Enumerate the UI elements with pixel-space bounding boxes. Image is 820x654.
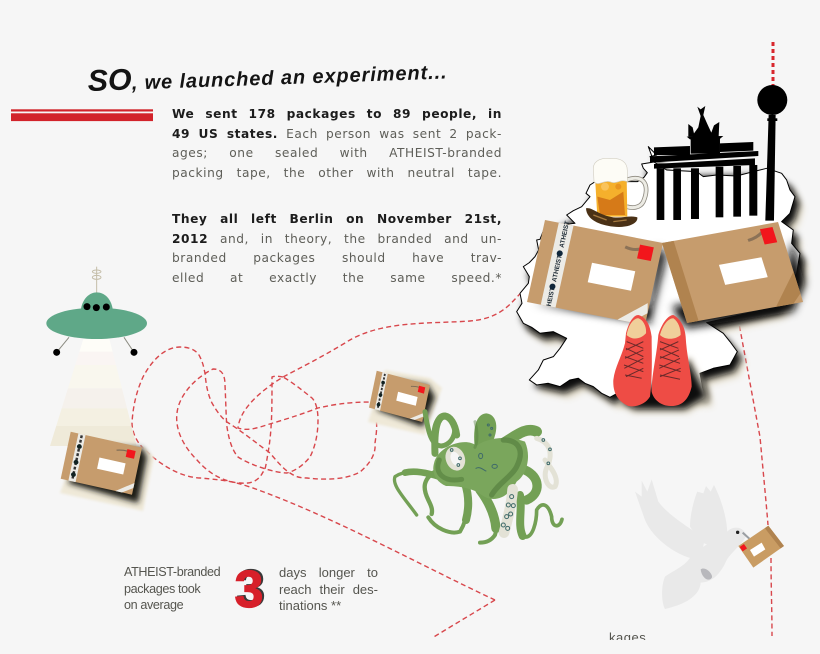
map outline [517,147,800,397]
paragraph: left Berlin: They all left Berlin on November 21st, [172,212,502,226]
route: dashed path through the loops [132,287,772,638]
paragraph: left Berlin [172,212,502,284]
stat: text after number: reach their des- [279,582,378,597]
tractor beam [50,388,136,446]
stat: text after number: tinations ** [279,598,341,613]
paragraph: left Berlin: elled at exactly the same speed.* [172,270,502,284]
title [87,52,447,98]
white gap between packages [652,273,675,327]
paragraph: packages sent [172,107,502,180]
neutral package [662,222,803,323]
antenna [92,267,101,293]
TV tower [757,85,787,221]
map shadow: dark [521,153,805,404]
stat: text before number: packages took [124,582,200,596]
Germany map with Berlin icons [517,85,809,409]
red double rule [11,109,153,121]
red sneakers [613,315,710,413]
branded package: ATHEIST [559,220,571,248]
branded package: HEIST [546,287,557,307]
map shadow: beige halo [525,159,809,409]
stat: text after number: days longer to [279,565,378,580]
tentacles [394,412,562,543]
saucer [81,292,113,312]
paragraph: packages sent: 49 US states. Each person was sent 2 pack- [172,126,502,140]
pale suckered tentacles [445,438,556,533]
stat: text after number [279,565,378,613]
octopus [394,412,562,543]
stat: text before number: ATHEIST-branded [124,565,220,579]
legs [57,337,134,352]
route: bold dotted line above the TV tower [772,42,774,86]
dove [635,479,749,609]
right package shadow [670,240,805,328]
big number 3: 3 [234,561,263,619]
paragraph: packages sent: ages; one sealed with ATHEIST-branded [172,146,502,160]
package near the octopus [368,370,442,435]
paragraph: packages sent: We sent 178 packages to 89 people, in [172,107,502,121]
beer stein and sausage [586,158,646,227]
stat: text before number: on average [124,598,183,612]
Brandenburg Gate [650,106,758,220]
big number 3: 3 [236,560,265,618]
paragraph: packages sent: packing tape, the other with neutral tape. [172,166,502,180]
paragraph: left Berlin: branded packages should have trav- [172,251,502,265]
title: , we launched an experiment... [130,61,447,94]
carried package [738,526,784,568]
branded package [527,217,664,325]
stat: text before number [124,565,220,612]
paragraph: left Berlin: 2012 and, in theory, the branded and un- [172,232,502,246]
head and body [474,413,496,450]
left package shadow [533,247,667,323]
UFO with tractor beam [46,266,147,446]
title: SO [87,63,132,98]
suckers [450,424,551,530]
package under UFO [60,432,154,511]
branded package: ATHEIST [551,255,564,283]
dove carrying a package [635,479,784,609]
